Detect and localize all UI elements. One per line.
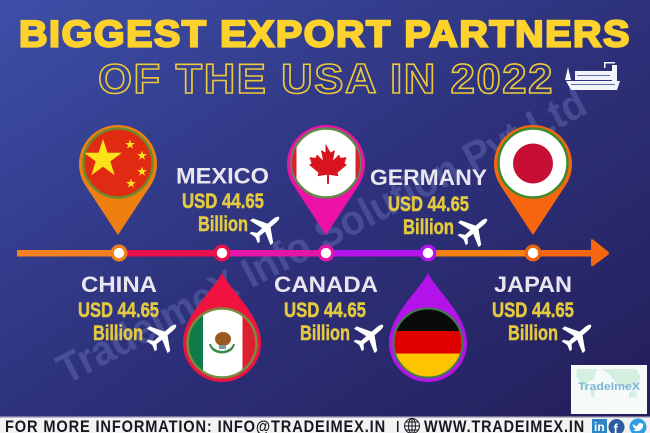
country name: CHINA — [81, 272, 157, 297]
value: USD 44.65 — [492, 299, 574, 322]
timeline arrow — [17, 239, 609, 266]
pin: Mexico flag — [183, 273, 261, 382]
country name: JAPAN — [494, 272, 572, 297]
title — [19, 14, 631, 102]
timeline node: Germany — [421, 246, 435, 260]
icon: Facebook — [608, 419, 624, 433]
title line 2: OF THE USA IN 2022 — [98, 55, 554, 102]
pin: Canada flag — [287, 125, 365, 235]
timeline node: Canada — [319, 246, 333, 260]
timeline node: China — [112, 246, 126, 260]
title line 1: BIGGEST EXPORT PARTNERS — [19, 14, 631, 54]
unit: Billion — [403, 216, 454, 239]
icon: plane — [347, 313, 393, 359]
unit: Billion — [508, 322, 558, 345]
label: Mexico — [176, 164, 289, 251]
value: USD 44.65 — [388, 193, 469, 216]
pin: Germany flag — [389, 273, 467, 382]
icon: plane — [140, 313, 186, 359]
icon: Twitter — [630, 418, 646, 433]
pin: China flag — [79, 125, 157, 235]
icon: LinkedIn — [592, 419, 607, 433]
logo: TradeImeX — [571, 365, 647, 414]
label: Canada — [274, 272, 393, 359]
label: Germany — [370, 165, 497, 253]
value: USD 44.65 — [78, 299, 159, 322]
label: Japan — [492, 272, 601, 359]
unit: Billion — [93, 322, 143, 345]
logo: TradeImeX: TradeImeX — [578, 381, 641, 393]
icon: plane — [555, 313, 601, 359]
watermark: TradeImeX Info Solution Pvt Ltd — [49, 79, 594, 393]
pin: Japan flag — [494, 125, 572, 235]
country name: MEXICO — [176, 164, 269, 188]
timeline node: Japan — [526, 246, 540, 260]
icon: plane — [451, 207, 497, 253]
country name: GERMANY — [370, 165, 487, 190]
footer bar — [0, 416, 650, 433]
country name: CANADA — [274, 272, 378, 297]
unit: Billion — [300, 322, 350, 345]
icon: globe — [404, 418, 420, 433]
value: USD 44.65 — [182, 190, 264, 213]
icon: cargo ship — [565, 62, 620, 90]
label: China — [78, 272, 186, 359]
timeline node: Mexico — [215, 246, 229, 260]
value: USD 44.65 — [284, 299, 366, 322]
icon: plane — [243, 205, 289, 251]
divider — [397, 421, 398, 432]
unit: Billion — [198, 213, 248, 236]
